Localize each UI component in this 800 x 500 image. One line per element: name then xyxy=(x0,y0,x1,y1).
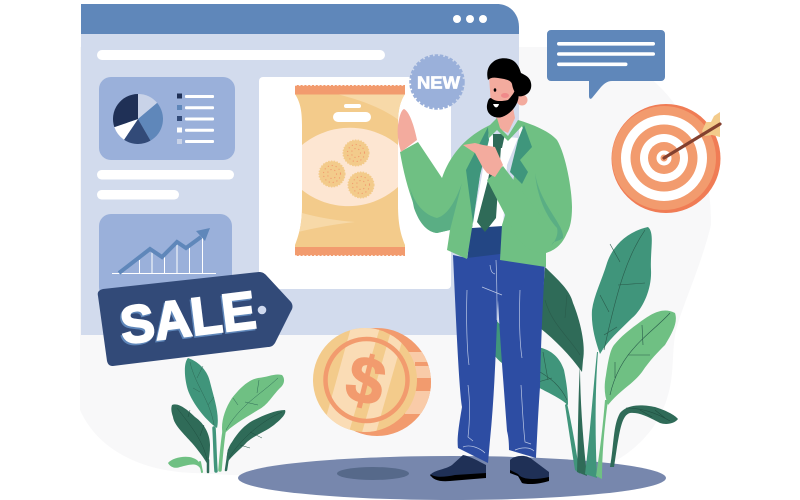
speech bubble xyxy=(547,30,665,99)
right shoe xyxy=(510,456,549,484)
trend arrow xyxy=(119,228,210,273)
eye xyxy=(494,88,496,92)
browser window xyxy=(81,4,519,335)
ground shadow xyxy=(238,456,666,500)
tag hole xyxy=(258,306,266,314)
product card xyxy=(259,77,451,289)
biscuit dots xyxy=(324,144,370,194)
legend xyxy=(177,94,214,144)
trousers xyxy=(453,254,545,463)
SALE label: SALE xyxy=(117,281,259,356)
stems xyxy=(200,428,229,472)
columns xyxy=(112,236,216,274)
SALE shadow: SALE xyxy=(116,282,258,358)
bottom seal xyxy=(295,247,405,256)
drooping leaf xyxy=(610,405,678,467)
smile xyxy=(493,104,499,107)
leaves xyxy=(185,358,218,428)
tie xyxy=(477,134,505,232)
coin shadow xyxy=(337,467,409,480)
text placeholder bars xyxy=(97,170,234,200)
coin ring xyxy=(326,339,408,421)
jacket left side xyxy=(400,125,490,259)
address bar xyxy=(97,50,385,60)
trouser creases xyxy=(463,260,534,453)
dollar sign: $ xyxy=(339,340,393,420)
arrow fletching xyxy=(702,112,720,137)
pie xyxy=(113,94,163,144)
bag body xyxy=(295,94,405,247)
background blob xyxy=(80,47,711,477)
bag highlights xyxy=(298,94,405,232)
window dots xyxy=(453,15,487,23)
pointing hand xyxy=(463,143,503,177)
neck xyxy=(495,102,515,133)
sale tag xyxy=(98,272,292,366)
ear xyxy=(516,94,528,106)
coin stripes xyxy=(326,328,402,432)
cheek xyxy=(501,93,509,98)
panel: pie chart xyxy=(99,77,235,160)
stems xyxy=(565,352,608,479)
collar xyxy=(488,118,523,141)
badge: NEW: NEW xyxy=(417,72,461,92)
left plant xyxy=(168,358,285,472)
light leaf xyxy=(605,310,676,405)
mid leaf xyxy=(535,347,568,405)
right arm sleeve xyxy=(487,166,556,253)
coin edge xyxy=(405,352,431,414)
raised hand xyxy=(398,109,417,152)
trousers top xyxy=(467,225,502,262)
hang hole xyxy=(333,104,371,122)
sleeve shadow left xyxy=(410,183,462,233)
hair xyxy=(487,58,531,96)
illustration xyxy=(81,4,722,500)
face xyxy=(489,76,518,110)
right lapel xyxy=(510,125,532,184)
dark leaf xyxy=(540,267,584,372)
target xyxy=(612,104,720,213)
top seal xyxy=(295,85,405,94)
panel: line chart xyxy=(99,214,232,299)
leaf between legs xyxy=(493,318,505,365)
product bag xyxy=(295,85,405,256)
left lapel xyxy=(466,127,489,223)
sleeve shadow right xyxy=(512,173,563,250)
arrow shaft xyxy=(664,124,720,158)
biscuits xyxy=(319,140,374,198)
tall leaf xyxy=(592,227,652,354)
veins xyxy=(538,230,670,421)
person xyxy=(398,58,572,484)
bubble text lines xyxy=(557,42,655,66)
left shoe xyxy=(430,455,486,481)
shirt xyxy=(472,135,518,228)
coin xyxy=(313,324,435,436)
right plant xyxy=(493,227,678,479)
beard xyxy=(487,90,519,118)
badge: NEW xyxy=(411,56,463,108)
jacket right side xyxy=(500,120,572,267)
label window xyxy=(302,128,398,206)
title bar xyxy=(81,4,519,34)
leaf veins xyxy=(190,362,278,430)
